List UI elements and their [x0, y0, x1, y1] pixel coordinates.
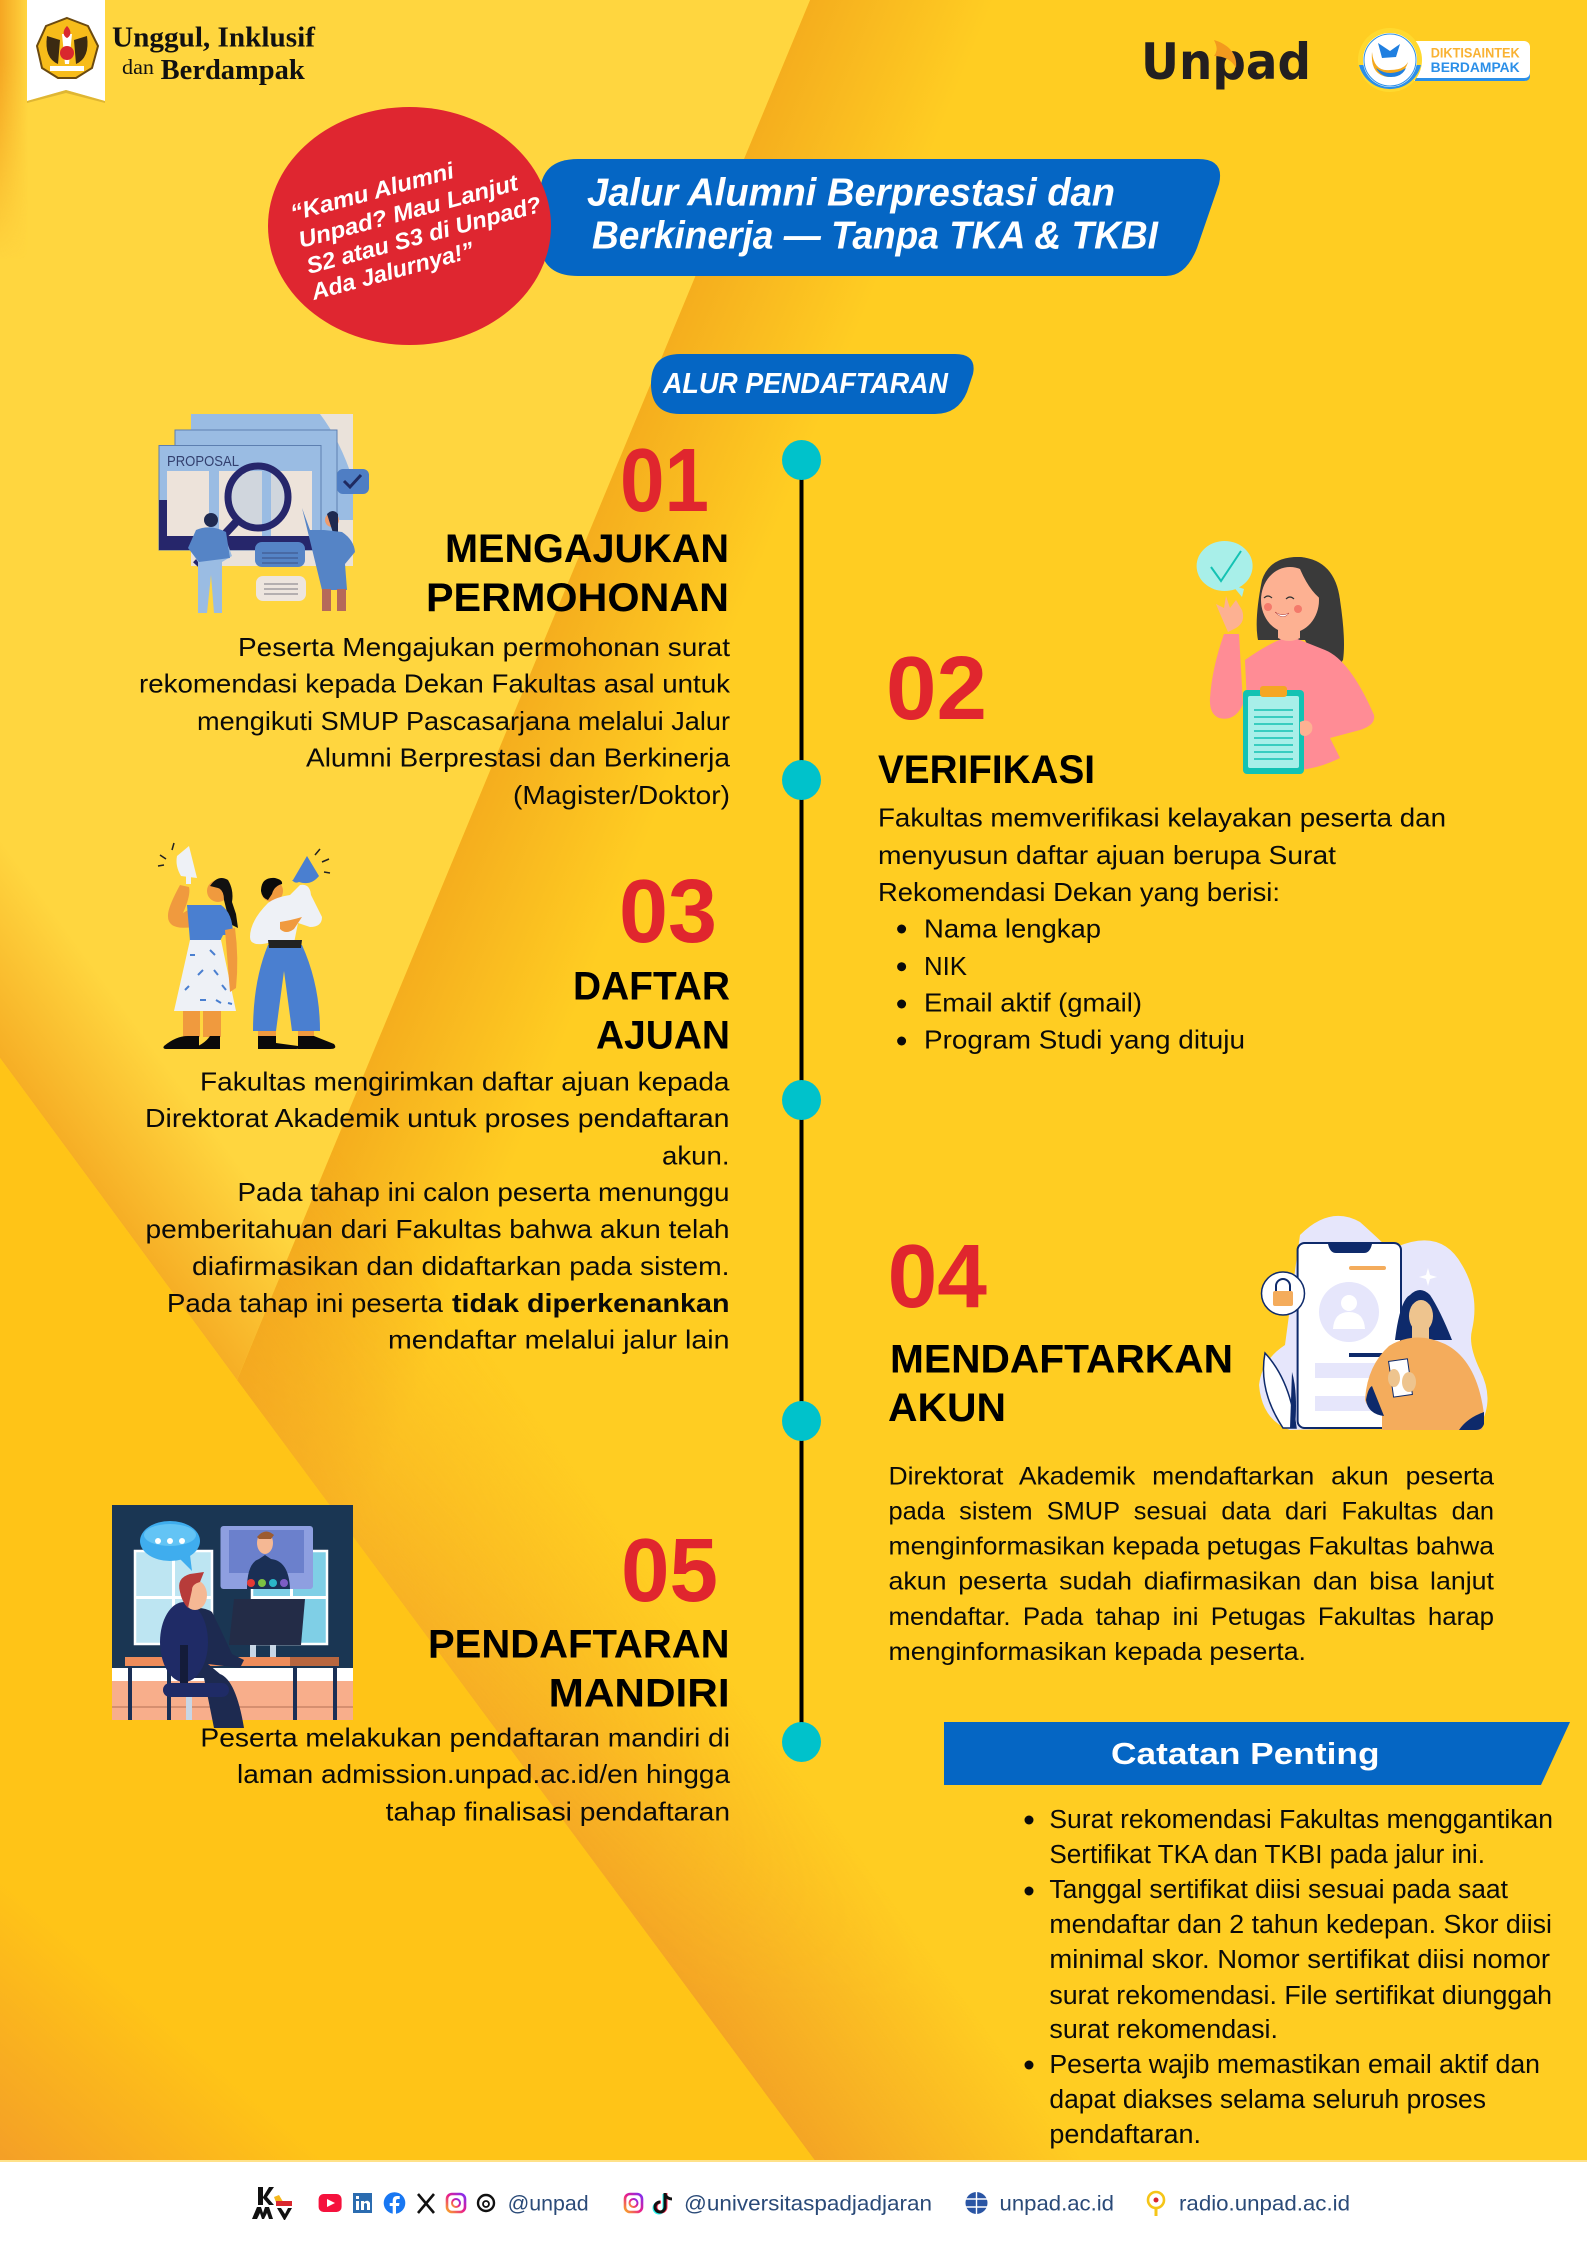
phone: [1298, 1243, 1401, 1428]
man with blue megaphone: [250, 849, 335, 1049]
step 02: [878, 639, 1446, 1055]
catatan list: Surat rekomendasi Fakultas menggantikan: [1049, 1806, 1553, 1834]
step 01: Peserta Mengajukan permohonan surat: [238, 632, 731, 662]
step 03: tidak diperkenankan: [452, 1288, 730, 1318]
step 03: Pada tahap ini calon peserta menunggu: [238, 1177, 730, 1207]
step 02: Fakultas memverifikasi kelayakan peserta dan: [878, 803, 1446, 833]
step 03: [145, 862, 730, 1355]
website: unpad.ac.id: [1000, 2193, 1114, 2216]
tagline: Unggul, Inklusif: [112, 23, 316, 54]
step 04: Direktorat Akademik mendaftarkan akun peserta: [888, 1463, 1494, 1491]
step 03: Direktorat Akademik untuk proses pendaftaran: [145, 1103, 730, 1133]
step 03: pemberitahuan dari Fakultas bahwa akun telah: [146, 1214, 730, 1244]
step 04: MENDAFTARKAN: [890, 1338, 1233, 1382]
icon: KAMI logo: [252, 2187, 292, 2220]
title banner: Jalur Alumni Berprestasi dan: [587, 172, 1115, 214]
step 03: 03: [619, 862, 717, 962]
step 01: (Magister/Doktor): [513, 780, 730, 810]
step 05: 05: [621, 1521, 718, 1621]
step 04: menginformasikan kepada petugas Fakultas bahwa: [888, 1533, 1494, 1561]
monitor: [229, 1599, 305, 1657]
red quote circle: Ada Jalurnya!”: [308, 236, 477, 305]
step 05: MANDIRI: [549, 1672, 730, 1716]
step 05: laman admission.unpad.ac.id/en hingga: [237, 1759, 731, 1789]
step 01: [139, 431, 731, 810]
tagline: [112, 23, 316, 86]
step 01: MENGAJUKAN: [445, 527, 729, 571]
icon: threads: [478, 2195, 494, 2211]
step 05: tahap finalisasi pendaftaran: [386, 1797, 730, 1827]
icon: globe: [966, 2192, 988, 2214]
step 01: Alumni Berprestasi dan Berkinerja: [306, 743, 731, 773]
icon: tiktok: [654, 2193, 672, 2213]
step 01: PERMOHONAN: [426, 576, 729, 620]
Diktisaintek Berdampak logo: [1358, 28, 1530, 92]
illustration: phone registration: [1259, 1216, 1488, 1430]
step 03: diafirmasikan dan didaftarkan pada sistem.: [192, 1251, 730, 1281]
catatan heading: Catatan Penting: [1111, 1736, 1380, 1771]
man figure: [188, 513, 232, 613]
catatan heading: [944, 1722, 1570, 1785]
catatan list: dapat diakses selama seluruh proses: [1049, 2086, 1486, 2114]
step 04: pada sistem SMUP sesuai data dari Fakultas dan: [888, 1498, 1494, 1526]
footer bar: [0, 2160, 1587, 2245]
catatan list: Peserta wajib memastikan email aktif dan: [1049, 2051, 1540, 2079]
handle: unpad: @unpad: [508, 2193, 589, 2216]
step 02: VERIFIKASI: [878, 748, 1095, 792]
catatan list: Tanggal sertifikat diisi sesuai pada saat: [1049, 1876, 1508, 1904]
person in chair: [160, 1572, 244, 1728]
icon: youtube: [319, 2194, 342, 2212]
lock badge: [1262, 1272, 1304, 1315]
step 02: 02: [886, 639, 987, 739]
Unpad logo: Unpad: [1141, 33, 1311, 91]
illustration: video call at desk: [112, 1505, 353, 1728]
step 02: Email aktif (gmail): [924, 988, 1142, 1018]
red quote circle: S2 atau S3 di Unpad?: [304, 191, 544, 279]
step 03: akun.: [662, 1141, 730, 1171]
icon: radio: [1148, 2192, 1164, 2216]
catatan list: surat rekomendasi.: [1049, 2016, 1278, 2044]
illustration: proposal review: [159, 414, 369, 613]
timeline: [782, 440, 821, 1762]
tagline: dan: [122, 55, 155, 79]
step 04: AKUN: [888, 1386, 1006, 1430]
icon: linkedin: [353, 2193, 372, 2213]
step 05: PENDAFTARAN: [428, 1623, 730, 1667]
step 03: AJUAN: [596, 1014, 730, 1058]
step 01: 01: [620, 431, 709, 531]
catatan list: Sertifikat TKA dan TKBI pada jalur ini.: [1049, 1841, 1485, 1869]
red quote circle: “Kamu Alumni: [288, 157, 457, 226]
step 04: akun peserta sudah diafirmasikan dan bisa lanjut: [888, 1568, 1494, 1596]
illustration: woman with clipboard: [1197, 541, 1374, 774]
ribbon logo: [27, 0, 105, 103]
title banner: Berkinerja — Tanpa TKA & TKBI: [592, 214, 1159, 258]
icon: x: [418, 2194, 434, 2213]
Diktisaintek Berdampak logo: DIKTISAINTEK: [1431, 46, 1520, 61]
leaves: [1263, 1353, 1296, 1428]
step 03: DAFTAR: [573, 965, 730, 1009]
desk: [125, 1657, 339, 1720]
step 03: Pada tahap ini peserta: [167, 1288, 444, 1318]
video screen: [220, 1526, 313, 1589]
step 02: menyusun daftar ajuan berupa Surat: [878, 840, 1337, 870]
handle: universitaspadjadjaran: @universitaspadjadjaran: [684, 2193, 932, 2216]
woman: [1365, 1290, 1484, 1430]
Diktisaintek Berdampak logo: BERDAMPAK: [1431, 60, 1520, 75]
step 02: NIK: [924, 951, 968, 981]
illustration: two people with megaphones: [158, 843, 335, 1049]
icon: facebook: [384, 2192, 405, 2214]
step 02: Rekomendasi Dekan yang berisi:: [878, 877, 1280, 907]
clipboard: [1243, 686, 1304, 774]
catatan list: pendaftaran.: [1049, 2121, 1201, 2149]
section heading: alur pendaftaran: ALUR PENDAFTARAN: [662, 368, 949, 400]
catatan list: minimal skor. Nomor sertifikat diisi nomor: [1049, 1946, 1551, 1974]
step 04: mendaftar. Pada tahap ini Petugas Fakultas harap: [888, 1603, 1494, 1631]
chat bubble: [140, 1521, 200, 1571]
step 04: 04: [888, 1227, 987, 1327]
step 05: Peserta melakukan pendaftaran mandiri di: [200, 1723, 730, 1753]
speech bubble check: [1197, 541, 1253, 597]
step 05: [200, 1521, 731, 1827]
step 03: mendaftar melalui jalur lain: [388, 1325, 730, 1355]
woman with white megaphone: [158, 843, 238, 1049]
step 04: menginformasikan kepada peserta.: [888, 1638, 1306, 1666]
radio website: radio.unpad.ac.id: [1179, 2193, 1350, 2216]
panel: catatan penting: [944, 1722, 1570, 2149]
catatan list: [1024, 1806, 1553, 2149]
step 01: rekomendasi kepada Dekan Fakultas asal untuk: [139, 669, 731, 699]
catatan list: surat rekomendasi. File sertifikat diunggah: [1049, 1982, 1552, 2010]
icon: instagram 2: [625, 2194, 642, 2212]
woman figure: [302, 508, 355, 611]
step 02: Nama lengkap: [924, 914, 1101, 944]
step 03: Fakultas mengirimkan daftar ajuan kepada: [200, 1067, 730, 1097]
red quote circle: Unpad? Mau Lanjut: [296, 169, 522, 253]
tagline: Berdampak: [161, 55, 305, 86]
step 04: [888, 1227, 1494, 1666]
windows: [135, 1551, 327, 1644]
catatan list: mendaftar dan 2 tahun kedepan. Skor diisi: [1049, 1911, 1552, 1939]
illustration: proposal review: PROPOSAL: [167, 454, 239, 470]
icon: university shield: [37, 18, 98, 78]
title banner: [540, 159, 1220, 276]
step 01: mengikuti SMUP Pascasarjana melalui Jalur: [197, 706, 730, 736]
icon: instagram: [447, 2194, 465, 2212]
step 02: Program Studi yang dituju: [924, 1025, 1245, 1055]
red quote circle: [268, 107, 551, 345]
section heading: alur pendaftaran: [651, 354, 974, 414]
